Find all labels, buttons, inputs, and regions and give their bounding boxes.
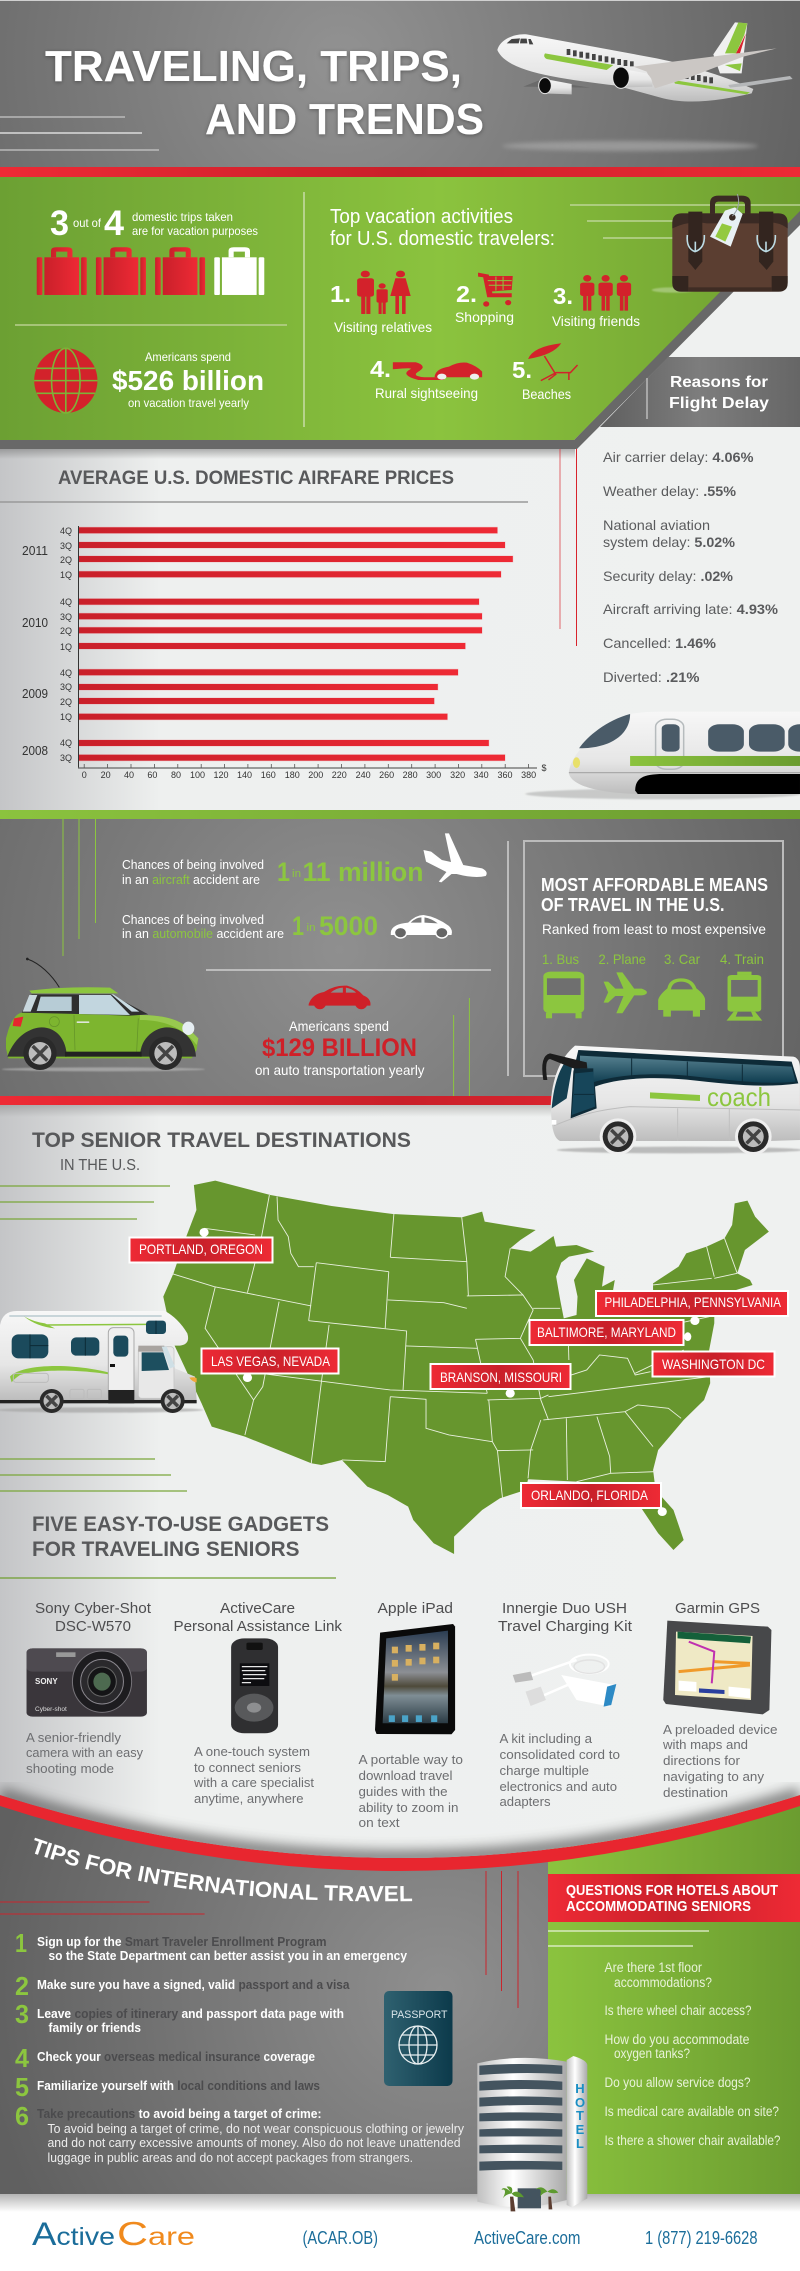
activity 3: visiting friends [552, 275, 640, 329]
panel: green statistics [0, 177, 800, 440]
stat: aircraft accident odds: 11 million [302, 857, 424, 887]
heading: top senior travel destinations: IN THE U.S. [60, 1157, 140, 1174]
gadget: Garmin GPS: with maps and [662, 1737, 748, 1752]
heading: top senior travel destinations [32, 1129, 411, 1174]
bar chart: 160 [261, 770, 276, 780]
icon: recreational vehicle [0, 1311, 203, 1413]
hotel questions list: Do you allow service dogs? [604, 2075, 750, 2090]
panel: tips and hotel background [0, 1790, 800, 2194]
gadget: ActiveCare link: Personal Assistance Link [174, 1618, 342, 1635]
title: AND TRENDS [205, 95, 484, 144]
hotel questions list [604, 1960, 780, 2148]
tip text: so the State Department can better assist you in an emergency [48, 1948, 408, 1963]
gadget: Innergie charging kit: electronics and auto [500, 1779, 617, 1794]
gadget: Apple iPad: download travel [358, 1768, 453, 1783]
gadget: Innergie charging kit: A kit including a [500, 1731, 593, 1746]
gadget: Garmin GPS: directions for [663, 1753, 741, 1768]
bar chart: 240 [356, 770, 371, 780]
bar chart: 2Q [60, 555, 72, 565]
stat: 3 out of 4: are for vacation purposes [132, 224, 258, 238]
bar chart: 1Q [60, 642, 72, 652]
activity 5: beaches [512, 343, 578, 402]
stat: 3 out of 4: out of [73, 216, 102, 230]
ActiveCare logo [32, 2215, 195, 2252]
stat: 3 out of 4: 3 [50, 204, 69, 243]
label: Las Vegas, Nevada [202, 1348, 338, 1374]
stat: auto transportation spending: $129 BILLION [262, 1034, 417, 1062]
stat: 3 out of 4: 4 [104, 204, 125, 243]
gadget: Apple iPad [358, 1600, 463, 1830]
coach label: coach [707, 1082, 771, 1112]
tip text: Leave copies of itinerary and passport data page with [37, 2006, 344, 2021]
bar chart: 2Q [60, 697, 72, 707]
map of the United States [163, 1181, 769, 1554]
contact details: (ACAR.OB) [302, 2228, 378, 2248]
heading: tips for international travel: TIPS FOR INTERNATIONAL TRAVEL [34, 1838, 412, 1902]
hotel questions list: Is there wheel chair access? [604, 2003, 752, 2018]
activity 1: visiting relatives: 1. [330, 281, 351, 307]
bar chart: $ [541, 763, 547, 773]
stat: aircraft accident odds: 1 [277, 857, 290, 887]
stat: 3 out of 4 [50, 204, 258, 243]
icon: globe [34, 348, 97, 413]
ranking labels: 1. Bus [542, 951, 579, 967]
gadget: Apple iPad: guides with the [358, 1784, 448, 1799]
icon: brown suitcase [652, 194, 788, 293]
activity 5: beaches: 5. [512, 357, 532, 383]
bar chart: 4Q [60, 526, 72, 536]
tip numbers: 4 [15, 2043, 30, 2073]
footer [0, 2194, 800, 2271]
panel: airfare chart [0, 468, 547, 780]
bar chart: 220 [332, 770, 347, 780]
activity 1: visiting relatives: Visiting relatives [334, 319, 432, 335]
bar chart: 60 [147, 770, 157, 780]
list: flight delay reasons: Cancelled: 1.46% [603, 635, 717, 651]
ActiveCare logo: Active [32, 2216, 115, 2252]
ranking labels: 4. Train [720, 951, 764, 967]
icon: green mini car [2, 958, 205, 1071]
stat: vacation travel spending: on vacation travel yearly [128, 396, 249, 410]
tip text: Familiarize yourself with local conditions and laws [37, 2078, 320, 2093]
bar chart: 200 [308, 770, 323, 780]
bar chart: 360 [497, 770, 513, 780]
list: flight delay reasons: National aviation [603, 517, 710, 533]
gadget: Apple iPad: on text [358, 1815, 400, 1830]
decorative red lines [559, 449, 561, 629]
contact details [302, 2228, 758, 2248]
gadget: Sony camera: shooting mode [26, 1761, 114, 1776]
gadget: Innergie charging kit: charge multiple [500, 1763, 589, 1778]
tip text: Check your overseas medical insurance coverage [37, 2049, 315, 2064]
gadget: Sony camera: camera with an easy [26, 1745, 143, 1760]
hotel questions list: oxygen tanks? [614, 2046, 690, 2061]
stat: automobile accident odds [122, 911, 452, 941]
bar chart: 40 [124, 770, 134, 780]
list: flight delay reasons [603, 449, 779, 685]
bar chart: 80 [171, 770, 181, 780]
tip numbers: 3 [15, 1999, 29, 2029]
bar chart: 1Q [60, 570, 72, 580]
contact details: 1 (877) 219-6628 [645, 2228, 758, 2248]
label: Branson, Missouri: BRANSON, MISSOURI [440, 1369, 562, 1385]
bar chart: 2009 [22, 686, 48, 701]
bar chart: 300 [426, 770, 441, 780]
gadget: Garmin GPS: navigating to any [663, 1769, 765, 1784]
stat: auto transportation spending: Americans spend [289, 1018, 389, 1034]
icon: airplane [497, 22, 793, 101]
panel: most affordable means of travel: MOST AFFORDABLE MEANS [541, 875, 768, 895]
hotel questions list: accommodations? [614, 1975, 712, 1990]
hotel questions heading: ACCOMMODATING SENIORS [566, 1898, 751, 1915]
stat: automobile accident odds: in [306, 922, 316, 934]
shadow below red band [0, 1105, 800, 1117]
tip text: family or friends [48, 2020, 141, 2035]
contact details: ActiveCare.com [474, 2228, 580, 2248]
activity 4: rural sightseeing [370, 356, 482, 401]
icon: suitcases [37, 247, 264, 295]
gadget: Garmin GPS: destination [663, 1785, 728, 1800]
bar chart: 280 [403, 770, 418, 780]
gadget: Apple iPad: ability to zoom in [358, 1800, 458, 1815]
activity 3: visiting friends: Visiting friends [552, 313, 640, 329]
gadget: Sony camera [26, 1600, 152, 1776]
gadget: ActiveCare link: anytime, anywhere [194, 1791, 304, 1806]
shadow below green panel [0, 449, 575, 459]
heading: top vacation activities: Top vacation activities [330, 206, 513, 228]
diagonal gray stripe [0, 208, 800, 449]
gadget: ActiveCare link: ActiveCare [220, 1600, 295, 1617]
ActiveCare logo: C are [117, 2215, 195, 2252]
heading: five gadgets: FIVE EASY-TO-USE GADGETS [32, 1513, 329, 1536]
gadget: Innergie charging kit [498, 1600, 633, 1809]
gadget: Garmin GPS: A preloaded device [663, 1722, 778, 1737]
stat: aircraft accident odds [122, 833, 487, 887]
label: Branson, Missouri [430, 1364, 570, 1389]
bar chart: 0 [82, 770, 87, 780]
activity 2: shopping [455, 273, 514, 325]
stat: automobile accident odds: 5000 [319, 911, 378, 941]
label: Philadelphia, Pennsylvania [596, 1291, 788, 1316]
gadget: Apple iPad: Apple iPad [378, 1600, 453, 1617]
bar chart: 4Q [60, 738, 72, 748]
gadget: Sony camera: Cyber-shot [35, 1706, 67, 1713]
green band [0, 810, 800, 819]
stat: auto transportation spending: on auto transportation yearly [255, 1062, 424, 1078]
stat: vacation travel spending [112, 350, 264, 410]
activity 2: shopping: 2. [456, 281, 477, 307]
title: TRAVELING, TRIPS, [45, 42, 462, 91]
gadget: Sony camera: A senior-friendly [26, 1730, 121, 1745]
bar chart: 2011 [22, 543, 48, 558]
gadget: Sony camera: SONY [35, 1677, 58, 1686]
bar chart: 20 [101, 770, 111, 780]
panel: questions for hotels [548, 1874, 800, 2148]
list: travel tips: luggage in public areas and do not accept packages from strangers. [48, 2150, 413, 2165]
hotel questions list: How do you accommodate [604, 2032, 750, 2047]
bar chart: 1Q [60, 712, 72, 722]
gadget: Sony camera: Sony Cyber-Shot [35, 1600, 152, 1617]
list: flight delay reasons: Air carrier delay: 4.06% [603, 449, 754, 465]
activity 4: rural sightseeing: 4. [370, 356, 391, 382]
stat: 3 out of 4: domestic trips taken [132, 210, 233, 224]
label: Orlando, Florida [521, 1483, 661, 1508]
icon: high-speed train [526, 712, 800, 799]
icon: coach bus [542, 1046, 800, 1155]
heading: five gadgets: FOR TRAVELING SENIORS [32, 1538, 300, 1561]
label: Portland, Oregon [130, 1238, 272, 1262]
bar chart: 100 [190, 770, 205, 780]
gadget: Apple iPad: A portable way to [358, 1752, 463, 1767]
gadget: Innergie charging kit: Travel Charging Kit [498, 1618, 633, 1635]
icon: hotel building: T [576, 2108, 584, 2123]
bar chart: 4Q [60, 668, 72, 678]
ranking labels [542, 951, 764, 967]
bar chart: 3Q [60, 682, 72, 692]
heading: five gadgets [32, 1513, 329, 1561]
bar chart: 3Q [60, 612, 72, 622]
tip numbers: 6 [15, 2101, 29, 2131]
activity 5: beaches: Beaches [522, 386, 571, 402]
gadget: Garmin GPS [662, 1600, 778, 1800]
tip text: Make sure you have a signed, valid passport and a visa [37, 1977, 350, 1992]
activity 2: shopping: Shopping [455, 309, 514, 325]
gadget: ActiveCare link: A one-touch system [194, 1744, 310, 1759]
stat: aircraft accident odds: Chances of being involved [122, 858, 264, 872]
label: Las Vegas, Nevada: LAS VEGAS, NEVADA [211, 1353, 331, 1369]
hotel questions list: Is medical care available on site? [604, 2104, 779, 2119]
stat: automobile accident odds: 1 [292, 911, 304, 941]
list: travel tips: To avoid being a target of crime, do not wear conspicuous clothing or jewelry [48, 2121, 464, 2136]
hotel questions list: Are there 1st floor [604, 1960, 702, 1975]
tip text [37, 1934, 408, 2121]
gadget: Innergie charging kit: Innergie Duo USH [502, 1600, 627, 1617]
bar chart: 260 [379, 770, 394, 780]
panel: most affordable means of travel: Ranked from least to most expensive [542, 921, 766, 937]
activity 1: visiting relatives [330, 271, 432, 335]
list: flight delay reasons: system delay: 5.02% [603, 534, 736, 550]
red curved band [0, 1795, 800, 1871]
stat: aircraft accident odds: in [292, 868, 301, 880]
stat: vacation travel spending: $526 billion [112, 365, 264, 396]
label: Portland, Oregon: PORTLAND, OREGON [139, 1241, 263, 1257]
heading: top senior travel destinations: TOP SENIOR TRAVEL DESTINATIONS [32, 1129, 411, 1152]
icon: hotel building: H [575, 2081, 585, 2096]
bar chart: 2008 [22, 743, 48, 758]
panel: header [0, 0, 800, 167]
panel: reasons for flight delay heading [600, 357, 800, 427]
label: Baltimore, Maryland [530, 1320, 684, 1345]
gadget: Garmin GPS: Garmin GPS [675, 1600, 760, 1617]
bar chart [22, 526, 547, 780]
bar chart: 320 [450, 770, 465, 780]
gadget: Innergie charging kit: adapters [500, 1794, 551, 1809]
panel: most affordable means of travel: OF TRAVEL IN THE U.S. [541, 895, 724, 915]
list: flight delay reasons: Aircraft arriving late: 4.93% [603, 601, 779, 617]
stat: aircraft accident odds: in an aircraft accident are [122, 873, 260, 887]
gadget: ActiveCare link [174, 1600, 342, 1806]
stat: auto transportation spending [255, 986, 424, 1078]
red band [0, 1096, 800, 1105]
label: Washington DC [652, 1352, 774, 1376]
panel: safety and cost section [0, 819, 800, 1096]
bar chart: 140 [237, 770, 252, 780]
stat: vacation travel spending: Americans spend [145, 350, 231, 364]
list: flight delay reasons: Weather delay: .55% [603, 483, 737, 499]
bar chart: 3Q [60, 753, 72, 763]
gadget: ActiveCare link: to connect seniors [194, 1760, 301, 1775]
ground shadow of airplane [502, 141, 758, 151]
stat: automobile accident odds: in an automobile accident are [122, 927, 284, 941]
icon: passport: PASSPORT [391, 2009, 448, 2021]
activity 4: rural sightseeing: Rural sightseeing [375, 385, 478, 401]
red band [0, 167, 800, 177]
tip numbers: 1 [15, 1928, 27, 1958]
ranking labels: 2. Plane [598, 951, 646, 967]
ranking labels: 3. Car [664, 951, 700, 967]
speed lines behind luggage [570, 205, 800, 238]
activity 3: visiting friends: 3. [553, 283, 573, 309]
icons: bus, plane, car, train [543, 972, 762, 1021]
label: Orlando, Florida: ORLANDO, FLORIDA [531, 1487, 649, 1503]
tip text: Sign up for the Smart Traveler Enrollment Program [37, 1934, 326, 1949]
tip numbers: 2 [15, 1971, 29, 2001]
hotel questions heading [548, 1874, 800, 1922]
icon: hotel building: O [575, 2095, 585, 2110]
tip numbers: 5 [15, 2072, 29, 2102]
bar chart: 2Q [60, 626, 72, 636]
gadget: Innergie charging kit: consolidated cord to [500, 1747, 620, 1762]
hotel questions list: Is there a shower chair available? [604, 2133, 780, 2148]
panel: reasons for flight delay heading: Flight Delay [669, 395, 769, 412]
panel: most affordable means of travel [524, 841, 783, 1076]
icon: hotel building: E [576, 2122, 585, 2137]
stat: automobile accident odds: Chances of being involved [122, 913, 264, 927]
tip text: Take precautions to avoid being a target of crime: [37, 2106, 322, 2121]
icon: hotel building: L [576, 2136, 584, 2151]
gadget: ActiveCare link: with a care specialist [193, 1775, 314, 1790]
curve shading [0, 1795, 800, 1858]
icon: passport [384, 1991, 452, 2086]
label: Washington DC: WASHINGTON DC [662, 1356, 765, 1372]
panel: reasons for flight delay heading: Reasons for [670, 374, 768, 391]
bar chart: 180 [285, 770, 300, 780]
bar chart: 2010 [22, 615, 48, 630]
list: travel tips [15, 1928, 464, 2165]
gadget: Sony camera: DSC-W570 [55, 1618, 131, 1635]
list: flight delay reasons: Diverted: .21% [603, 669, 700, 685]
title [45, 42, 484, 144]
icon: hotel building [477, 2056, 587, 2211]
bar chart: 380 [521, 770, 536, 780]
tip numbers [15, 1928, 30, 2131]
heading: top vacation activities: for U.S. domestic travelers: [330, 228, 555, 250]
chart heading: AVERAGE U.S. DOMESTIC AIRFARE PRICES [58, 468, 454, 489]
label: Baltimore, Maryland: BALTIMORE, MARYLAND [537, 1324, 676, 1340]
list: travel tips: and do not carry excessive amounts of money. Also do not leave unattended [48, 2135, 460, 2150]
list: flight delay reasons: Security delay: .02% [603, 568, 734, 584]
bar chart: 4Q [60, 597, 72, 607]
bar chart: 3Q [60, 541, 72, 551]
heading: top vacation activities [330, 206, 555, 250]
bar chart: 120 [213, 770, 229, 780]
bar chart: 340 [474, 770, 489, 780]
light curved section [0, 1500, 800, 1858]
